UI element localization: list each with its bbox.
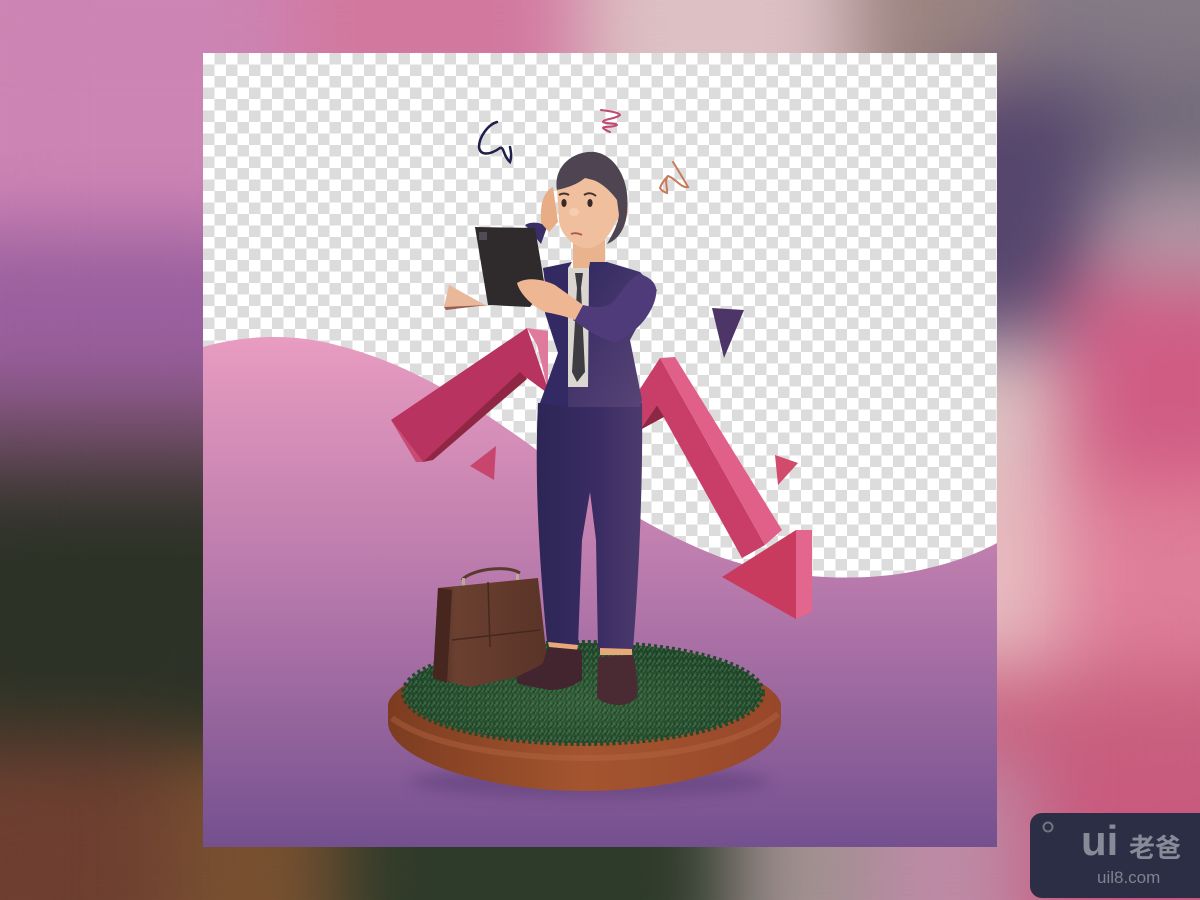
tie [572,273,585,382]
watermark badge: 老爸 [1129,828,1181,865]
neck [573,238,605,270]
arm sleeve [573,274,656,342]
icon: purple shard [712,308,744,358]
jacket left panel [540,262,572,407]
ear [614,198,628,222]
icon: squiggle pink [601,110,620,132]
panel: transparency checker backdrop [203,53,997,847]
icon: beige shard [444,285,487,310]
watermark badge: uil8.com [1097,868,1160,887]
jacket right panel [568,262,657,407]
face features [559,193,596,235]
briefcase [433,569,546,687]
icon: red shard left [470,446,496,480]
watermark badge: ui [1081,817,1118,864]
watermark badge [1030,813,1200,898]
shirt [568,268,590,387]
hand holding tablet [517,279,583,320]
head [557,175,620,248]
panel: pink to purple wave [203,337,997,847]
icon: squiggle orange [660,162,688,193]
icon: red shard right [775,455,798,485]
shoes [517,647,637,705]
icon: squiggle navy [479,122,511,162]
arrow: falling red chart arrow [391,328,812,619]
tablet [475,227,545,307]
platform with grass [388,643,781,798]
businessman [475,152,657,705]
trousers [537,403,642,655]
hair [557,152,628,244]
raised arm and hand [525,187,558,244]
